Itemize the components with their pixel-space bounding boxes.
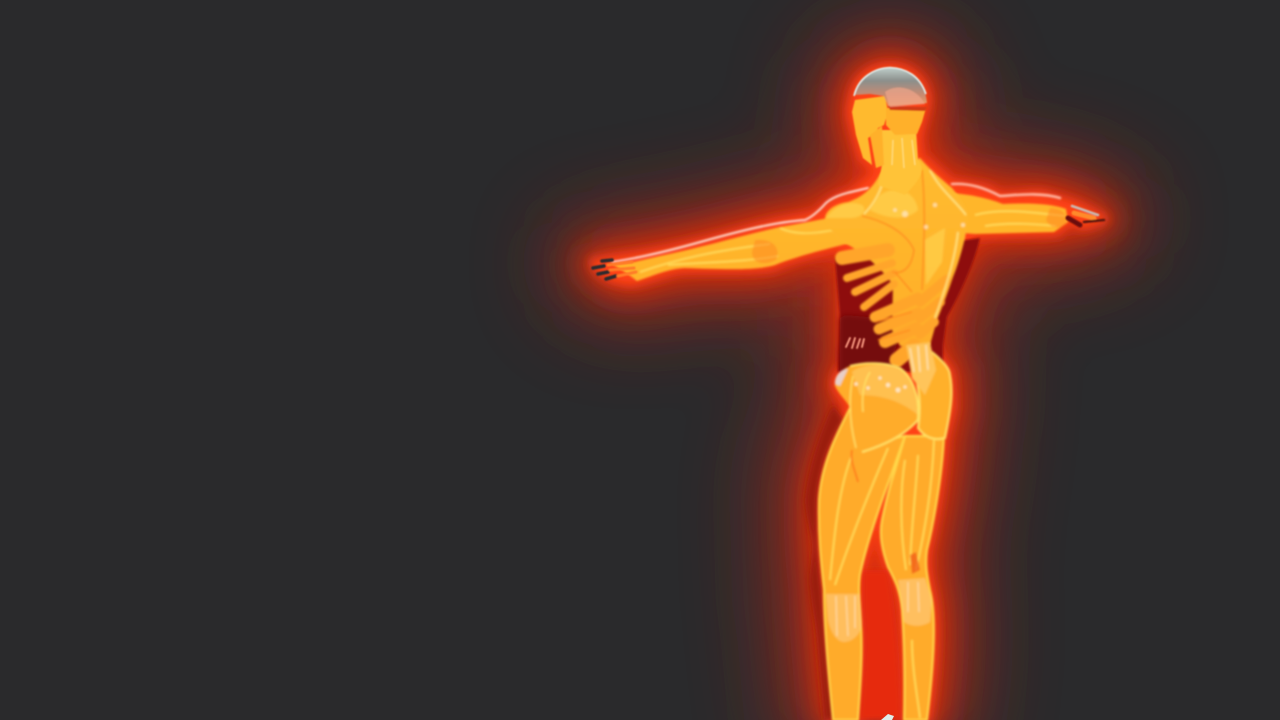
- figure: torso back muscles: [825, 158, 968, 360]
- arm muscle lines: [640, 211, 1065, 272]
- hip shimmer: [854, 376, 907, 392]
- right leg: [881, 436, 944, 720]
- figure: arms: [612, 184, 1068, 281]
- lumbar tendons: [906, 342, 936, 395]
- dark red torso and shadow side: [805, 238, 980, 720]
- left glute: [835, 363, 918, 452]
- shimmer highlights: [893, 164, 965, 229]
- left leg: [819, 408, 905, 720]
- figure: head and neck: [852, 68, 927, 195]
- icon: left hand fingers: [593, 260, 636, 279]
- middle red aura: [592, 67, 1106, 720]
- right glute: [910, 352, 952, 439]
- ribs fan: [842, 250, 946, 360]
- tight bright glow: [592, 67, 1106, 720]
- back muscle definition lines: [862, 170, 924, 340]
- figure: legs: [819, 342, 952, 720]
- icon: foot tip at bottom edge: [881, 714, 894, 720]
- icon: lit spot on lower back: [846, 338, 864, 348]
- wide red aura: [592, 67, 1106, 720]
- icon: right hand fingers: [1068, 206, 1104, 225]
- highlight: upper arm rim lights: [612, 184, 1060, 262]
- mid orange-red glow: [592, 67, 1106, 720]
